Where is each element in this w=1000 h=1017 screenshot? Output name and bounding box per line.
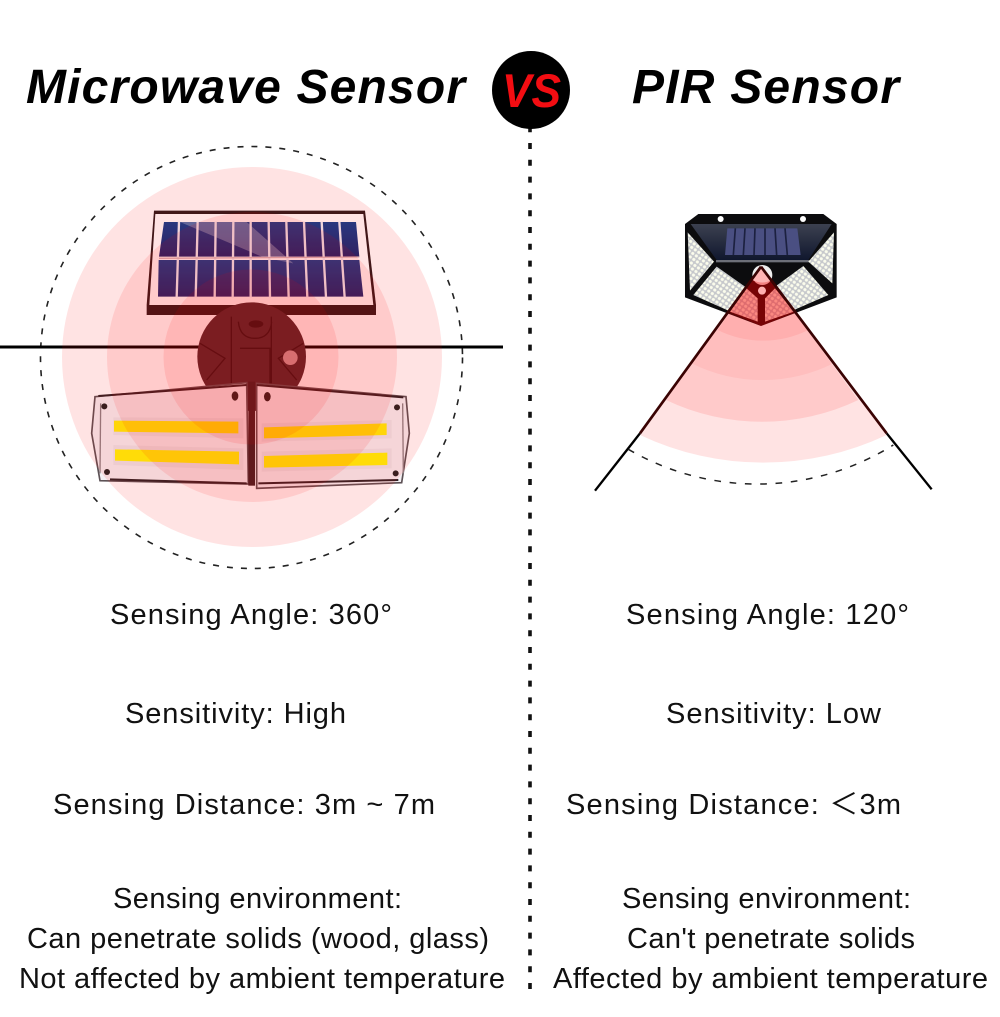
- sensing fan bands: [640, 267, 887, 463]
- sensing angle: Sensing Angle: 120°: [626, 599, 909, 631]
- sensing environment: Sensing environment:: [113, 883, 402, 915]
- sensing angle: Sensing Angle: 360°: [110, 599, 392, 631]
- panel: microwave sensor diagram: [0, 146, 503, 568]
- concentric sensing zones: [62, 167, 442, 547]
- sensing environment: Can't penetrate solids: [627, 923, 915, 955]
- sensing environment: Not affected by ambient temperature: [19, 963, 505, 995]
- vertical dotted divider: [528, 126, 532, 990]
- left lamp head: [92, 383, 248, 484]
- horizontal axis line: [0, 346, 503, 348]
- sensing distance: Sensing Distance: 3m ~ 7m: [53, 789, 435, 821]
- wall light product: [685, 214, 837, 326]
- dashed range arc: [628, 445, 893, 484]
- sensing environment: Sensing environment:: [622, 883, 911, 915]
- title: PIR Sensor: PIR Sensor: [632, 61, 901, 114]
- mounting holes: [718, 216, 724, 222]
- lamp centre hinge: [248, 382, 255, 486]
- right lamp head: [257, 383, 409, 488]
- lens highlights: [752, 267, 772, 295]
- PIR specs: [553, 599, 988, 995]
- PIR lens: [752, 265, 772, 285]
- VS badge: VS: [502, 64, 561, 117]
- VS badge: [492, 51, 570, 129]
- panel: PIR sensor diagram: [595, 214, 932, 491]
- sensing environment: Can penetrate solids (wood, glass): [27, 923, 489, 955]
- sensing environment: [19, 883, 505, 995]
- sensing environment: [553, 883, 988, 995]
- sensitivity: Sensitivity: High: [125, 698, 346, 730]
- microwave specs: [19, 599, 505, 995]
- solar panel: [147, 211, 376, 315]
- fan boundary lines: [595, 433, 932, 491]
- dashed detection range circle: [40, 146, 462, 568]
- sensitivity: Sensitivity: Low: [666, 698, 882, 730]
- solar flood light product: [92, 211, 409, 488]
- title: Microwave Sensor: Microwave Sensor: [26, 61, 467, 114]
- solar panel: [691, 224, 832, 260]
- sensing environment: Affected by ambient temperature: [553, 963, 988, 995]
- LED panels: [688, 232, 714, 291]
- sensing distance: Sensing Distance: ＜3m: [566, 789, 901, 821]
- mounting disc: [197, 302, 306, 411]
